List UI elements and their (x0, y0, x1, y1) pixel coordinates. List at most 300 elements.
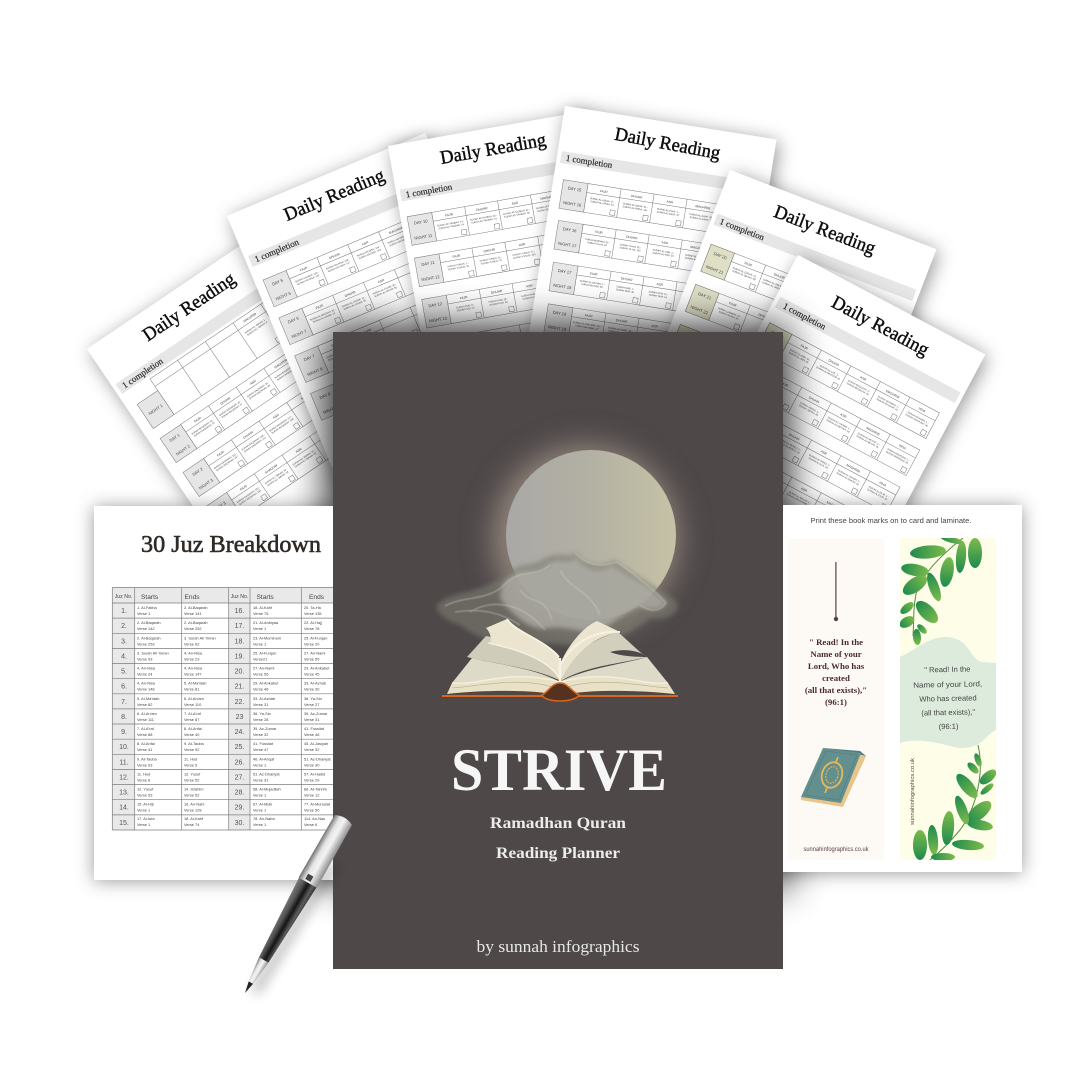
table: day 28: MAGHRIB (826, 500, 841, 511)
table: day 21: FAJR (728, 301, 738, 308)
table rows: Verse 31 (304, 717, 319, 722)
table: day 8: NIGHT 9 (322, 404, 340, 415)
table: day 16: DHUHR (626, 235, 639, 241)
table: day 16: FAJR (595, 230, 604, 235)
table: day 18: SURAH AN-NAML: 27 (575, 324, 599, 331)
table: day 25: FAJR (800, 344, 809, 351)
table: day 20: SURAH AL-QASAS: 88 (732, 270, 757, 282)
quote: Who has created (919, 693, 977, 704)
table: day 12: NIGHT 13 (428, 315, 448, 324)
table: day 12: ASR (526, 283, 534, 289)
icon: quran book (801, 748, 866, 807)
icon: leaves (898, 534, 999, 861)
table rows: 114. An-Nas (304, 816, 325, 821)
table: day 17: SURAH MU'MIN: 50 (581, 283, 603, 289)
heading: daily reading: Daily Reading (828, 292, 933, 361)
table rows: 33. Al-Azhab (304, 681, 326, 686)
table: day 11: SURAH YUNUS: 71 - (512, 250, 535, 257)
table header: Juz No. (231, 594, 248, 600)
table rows: 4. An-Nisa (184, 666, 203, 670)
table: day 15: DAY 15 (567, 185, 583, 193)
table: day 15: SURAH AL-ISRAA: 50 (590, 200, 615, 207)
table rows: Verse 6 (304, 822, 317, 827)
table rows: Verse 46 (304, 732, 319, 737)
table rows: 4. An-Nisa (137, 666, 156, 670)
table: day 21: NIGHT 22 (690, 304, 709, 316)
table: day 11: ASR (519, 242, 526, 247)
quote: (all that exists)," (805, 685, 867, 695)
table: day 16 (554, 220, 748, 279)
table: day 7 (295, 282, 483, 382)
table rows: 29. Al-Ankabut (304, 666, 330, 670)
table rows: 20. Ta-Ha (304, 605, 322, 610)
table rows: Verse 111 (137, 717, 154, 722)
table rows: 7. Al-A'raf (137, 726, 155, 731)
table rows: 26. (235, 759, 244, 766)
table rows: 22. Al-Hajj (304, 620, 322, 625)
panel: cover (333, 332, 783, 969)
table rows: 25. (235, 744, 244, 751)
table: day 1: SURAH BAQARAH: 49 - (274, 362, 298, 380)
table: night 1: SURAH ALI 'IMRAN: 9 (246, 321, 269, 337)
table: day 2: NIGHT 3 (198, 477, 215, 491)
table: day 22: DAY 22 (682, 331, 697, 341)
table: day 6: SURAH AL-AN'AM: 14 - (341, 296, 366, 309)
table rows: 17. Al-Isra (137, 816, 155, 821)
table: day 1: SURAH BAQARAH: 48 (249, 384, 271, 400)
quote: Lord, Who has (808, 661, 865, 671)
table: day 13: DHUHR (498, 330, 511, 336)
table rows: 8. Al-Anfal (184, 726, 202, 731)
label: 1 completion: 1 completion (405, 181, 453, 200)
table rows: Verse 55 (304, 656, 319, 661)
table: day 18: SURAH AN-NAML: 28 - (608, 326, 633, 333)
table rows: Verse 142 (137, 626, 155, 631)
table rows: 66. At-Tahrim (304, 787, 327, 792)
table rows: 5. Al-Ma'idah (184, 681, 206, 686)
table rows: 9. At-Tauba (137, 756, 158, 761)
table: day 7: DAY 7 (303, 353, 316, 362)
table: day 7: DHUHR (360, 327, 373, 336)
table: day 15 (559, 180, 753, 238)
table rows: Verse 1 (253, 626, 266, 631)
table rows: Verse 81 (184, 687, 199, 692)
table rows: 6. Al-An'am (184, 696, 204, 701)
url vertical: sunnahinfographics.co.uk (910, 758, 916, 825)
table rows: 3. (121, 638, 127, 645)
table rows: 14. (119, 805, 129, 812)
table: day 3: NIGHT 4 (221, 511, 237, 525)
table: day 18: DHUHR (616, 318, 628, 324)
table: day 7: SURAH AL-AN'AM: 128 (328, 349, 353, 362)
table: day 12: DHUHR (491, 289, 503, 295)
table: day 2: DHUHR (242, 430, 255, 440)
table rows: 4. An-Nisa (184, 650, 203, 655)
table: day 3: SURAH ALI 'IMRAN: 50 (294, 452, 317, 469)
table: day 6: ASR (377, 278, 385, 284)
table rows: Verse 87 (184, 717, 199, 722)
table rows: Verse 128 (184, 808, 202, 813)
table: day 10: NIGHT 11 (414, 233, 433, 241)
table: day 10: ASR (511, 201, 519, 206)
table: day 27: ASR (820, 449, 828, 456)
table: day 27: SURAH AL-GHASH: 26 (836, 472, 860, 487)
quote: " Read! In the (924, 665, 971, 674)
table: day 2: ASR (272, 412, 280, 420)
table rows: Verse 92 (184, 747, 199, 752)
table rows: 21. Al-Anbiyaa (253, 620, 279, 625)
bookmark: read quote with leaves (898, 534, 999, 861)
table header: Starts (256, 594, 274, 601)
table: day 16: ASR (661, 240, 669, 245)
table rows: 25. Al-Furqan (253, 650, 276, 655)
table: day 3: DAY 3 (214, 500, 227, 511)
table: day 26: SURAH AL-INFITAR: 19 (826, 419, 850, 434)
page: daily reading sheet 6 (652, 255, 985, 628)
subtitle line 2: Reading Planner (496, 845, 620, 862)
table: day 6: SURAH AL-AN'AM: 58 (374, 286, 398, 298)
table: day 2: SURAH BAQARAH: 157 (216, 455, 239, 472)
table rows: 29. Al-Ankabut (253, 681, 279, 686)
page: daily reading sheet 1 (87, 226, 443, 606)
table: day 25: SURAH AL-JINN: 28 (788, 351, 809, 365)
table rows: Verse 75 (253, 611, 268, 616)
table: day 17: NIGHT 18 (553, 282, 572, 290)
table rows: Verse 6 (137, 777, 150, 782)
table rows: Verse 5 (184, 762, 197, 767)
table rows: 2. Al-Baqarah (184, 605, 208, 610)
table rows: 21. (235, 684, 244, 691)
table: day 3: SURAH ALI 'IMRAN: 32 (267, 470, 290, 487)
table: day 26: FAJR (780, 381, 789, 388)
table: day 28: SURAH AL-BALAD: 1 - (788, 491, 811, 505)
table rows: Verse 30 (304, 762, 320, 767)
table: day 5: MAGHRIB (388, 226, 404, 235)
table rows: 23 (236, 714, 243, 721)
heading: daily reading: Daily Reading (613, 124, 722, 164)
table rows: Verse 47 (253, 747, 268, 752)
table rows: 1. Al-Fatiha (137, 605, 158, 610)
table: day 18: FAJR (585, 313, 594, 318)
table: day 25: SURAH AN-NABA: 1 - (907, 411, 929, 425)
quote: (all that exists)," (921, 707, 976, 718)
table: day 5: DHUHR (328, 252, 341, 260)
table: day 11 (414, 225, 608, 287)
table: day 27: DHUHR (788, 433, 801, 442)
table: day 2: SURAH BAQARAH: 177 - (269, 415, 293, 433)
table: day 26: SURAH INSHIQAQ: 25 (885, 450, 909, 465)
table: day 15: SURAH AL-KAHF: 38 - (689, 213, 714, 220)
table rows: Verse 1 (253, 641, 266, 646)
table rows: 58. Al-Mujadilah (253, 787, 281, 792)
table: day 28: ISHA (859, 518, 868, 525)
table rows: 15. (119, 820, 129, 827)
table: day 11: FAJR (452, 254, 461, 259)
watercolor wash (900, 637, 996, 748)
label: 1 completion: 1 completion (718, 216, 766, 243)
table: day 17: SURAH AL-MU'MIN: 1 - (580, 279, 605, 286)
table: day 26: SURAH AT-TAKWIR: 1 - (827, 416, 851, 431)
table: day 25: SURAH QIYAMAH: 1 - (877, 395, 900, 409)
table: day 11: SURAH YUNUS: 1 - (447, 262, 469, 269)
table: day 1: FAJR (193, 415, 203, 424)
url: sunnahinfographics.co.uk (804, 846, 869, 853)
table: day 12: SURAH HUD: 61 - (521, 292, 541, 298)
table: day 3 (206, 399, 381, 530)
table: day 27: SURAH AL-FAJR: 30 (866, 488, 888, 502)
table: day 12: DAY 12 (428, 301, 443, 308)
table: night 1: SURAH ALI 'IMRAN: 1 - (244, 318, 267, 335)
table: day 18: SURAH AN-NAML: 55 (608, 330, 632, 336)
table rows: 12. Yusuf (137, 787, 154, 792)
table rows (119, 605, 332, 827)
table rows: Verse 52 (184, 777, 199, 782)
table rows: 51. Az-Dhariyat (304, 756, 332, 761)
table: day 1: SURAH BAQARAH: 24 (193, 421, 216, 438)
table: day 6: SURAH AL-MA'IDAH: 82 - (309, 308, 336, 322)
table: day 2 (183, 365, 358, 497)
table rows: Verse 148 (137, 687, 155, 692)
table: day 1: SURAH BAQARAH: 10 - (191, 418, 215, 436)
table: day 16: MAGHRIB (690, 245, 705, 251)
table rows: 11. Hud (184, 756, 197, 761)
table: day 26: DHUHR (808, 395, 821, 405)
table: day 5: SURAH AN-NISA: 163 - (387, 232, 412, 245)
table rows: Verse 78 (304, 626, 319, 631)
table rows: 8. (121, 714, 127, 721)
table: day 12: SURAH HUD: 28 - (488, 298, 508, 304)
table: day 10: SURAH AT-TAUBAH: 24 (438, 223, 465, 230)
table: day 17: DHUHR (621, 276, 633, 282)
page: daily reading sheet 5 (619, 170, 936, 539)
table: day 18: DAY 18 (552, 310, 567, 317)
table rows: 2. (121, 623, 127, 630)
table: day 27: SURAH AL-GHASH: 1 - (837, 469, 861, 484)
table rows: 39. Az-Zumar (304, 711, 328, 716)
table rows: Verse 50 (304, 808, 320, 813)
table: day 10: MAGHRIB (540, 194, 555, 201)
table rows: 15. Al-Hijr (137, 802, 155, 807)
table: day 10: SURAH AT-TAUBAH: 55 (504, 211, 531, 219)
table: day 10: DAY 10 (413, 218, 429, 226)
table: day 13 (429, 308, 623, 369)
table rows: 30. (235, 820, 244, 827)
table: day 17: SURAH NUR: 31 - (648, 290, 668, 296)
table rows: Verse 88 (137, 732, 152, 737)
table: day 28: SURAH AD-DUHA: 11 (817, 509, 840, 523)
table: day 3: SURAH ALI 'IMRAN: 10 - (264, 468, 288, 485)
table: day 6: SURAH AL-AN'AM: 13 (312, 312, 336, 324)
table: day 2: FAJR (216, 449, 226, 458)
table: day 2: SAF (300, 394, 307, 401)
table: day 17: FAJR (590, 271, 599, 277)
table rows: 57. Al-Hadid (304, 771, 325, 776)
bookmark: read quote with quran (788, 539, 884, 860)
table: day 27: SURAH AL-BURUJ: 22 (777, 441, 801, 455)
table rows: 27. An-Naml (253, 666, 275, 670)
table header: Starts (141, 594, 159, 601)
table: day 18: NIGHT 19 (548, 324, 567, 332)
table: day 10: SURAH AT-TAUBAH: 70 (537, 206, 564, 213)
table rows: 19. (235, 653, 244, 660)
table: day 25: SURAH AL-MUZZAM: 20 (815, 366, 841, 381)
table: day 2: SURAH BAQARAH: 176 (243, 436, 267, 453)
table: day 27: ISHA (878, 481, 888, 488)
table: day 11: NIGHT 12 (421, 274, 441, 282)
table: day 2: SURAH BAQARAH: 188 (271, 417, 295, 435)
table rows: Verse 52 (184, 793, 199, 798)
table rows: 5. Al-Ma'idah (137, 696, 159, 701)
table rows: 36. Ya-Sin (253, 711, 271, 716)
table: day 25: SURAH MUDDATH: 56 (846, 382, 870, 397)
table header: Juz No. (115, 594, 132, 600)
table: day 25: MAGHRIB (885, 389, 900, 399)
table header (115, 594, 325, 601)
table rows: 2. Al-Baqarah (137, 620, 161, 625)
illustration: open book (442, 619, 678, 701)
table: day 10: SURAH AT-TAUBAH: 56 - (536, 203, 563, 210)
table: day 21 (685, 284, 875, 380)
table rows: 13. (119, 790, 129, 797)
table: day 27: SURAH AL-FAJR: 1 - (868, 485, 889, 499)
table rows: 10. (119, 744, 129, 751)
table: day 11: SURAH YUNUS: 109 (513, 253, 536, 260)
table: day 28: NIGHT 29 (702, 453, 721, 467)
table: day 20: SURAH AL-ANKABUT: 1 - (763, 278, 790, 291)
table: day 6: SURAH AL-AN'AM: 35 (343, 299, 367, 311)
heading: daily reading: Daily Reading (439, 130, 548, 169)
table rows: Verse 1 (137, 611, 150, 616)
table rows: Verse 253 (137, 641, 155, 646)
table: night 1: NIGHT 1 (147, 403, 164, 416)
panel: bookmarks sheet (775, 505, 1022, 872)
table: day 26: NIGHT 27 (741, 379, 761, 392)
table: day 16: NIGHT 17 (558, 241, 578, 249)
table: day 3: SHADOW (264, 463, 278, 475)
table: juz breakdown (112, 588, 339, 830)
table rows: 4. An-Nisa (137, 681, 156, 686)
table: day 11: DHUHR (483, 247, 496, 253)
table rows: 1. (121, 608, 127, 615)
table rows: Verse 93 (137, 656, 152, 661)
table: day 3: ASR (295, 446, 303, 454)
table: day 7: NIGHT 8 (306, 366, 324, 377)
table: day 15: SURAH AL-KAHF: 74 (689, 216, 713, 223)
table: day 26: SURAH AL-MUTAF: 1 - (857, 432, 881, 446)
table: day 2: DAY 2 (191, 466, 204, 477)
table: day 10: FAJR (445, 212, 454, 218)
table: day 10: SURAH AT-TAUBAH: 14 - (437, 220, 465, 228)
table: day 10: DHUHR (476, 206, 489, 212)
table: day 26: ISHA (898, 443, 907, 451)
table rows: 27. An-Naml (304, 650, 326, 655)
table: day 16: SURAH AL-ANB: 1 - (652, 249, 675, 255)
table: day 5: ASR (361, 240, 370, 246)
table: day 26: SURAH INSHIQAQ: 1 - (886, 448, 910, 462)
label: 1 completion: 1 completion (253, 237, 301, 264)
table rows: 9. (121, 729, 127, 736)
table: day 6 (279, 244, 467, 345)
table rows: 17. (235, 623, 244, 630)
page: daily reading sheet 2 (227, 133, 545, 502)
table: day 15: SURAH AL-ISRAA: 104 (622, 205, 648, 212)
table: day 27 (717, 397, 900, 513)
quote: Name of your (810, 649, 862, 659)
table rows: Verse 1 (253, 808, 266, 813)
table: day 25: SURAH AL-JINN: 10 - (789, 348, 811, 362)
table: day 22: NIGHT 23 (674, 344, 694, 356)
table rows: 4. (121, 653, 127, 660)
table rows: 45. Al-Jasiyah (304, 741, 328, 746)
table: day 25: SURAH AD-DAHR: 31 (876, 398, 899, 412)
table: day 26: MAGHRIB (865, 426, 880, 437)
table rows: 16. An-Nahl (184, 802, 204, 807)
label: 1 completion: 1 completion (565, 153, 614, 170)
table rows: 33. Al-Azhab (253, 696, 275, 701)
table: day 13: NIGHT 14 (436, 357, 455, 365)
table: day 20: SURAH AL-ANKABUT: 30 (762, 281, 789, 294)
table rows: Verse 92 (184, 641, 199, 646)
table rows: 3. Surah Ali 'Imran (184, 635, 216, 640)
table: day 15: SURAH AL-ISRAA: 17 - (590, 197, 615, 204)
table rows: 8. Al-Anfal (137, 741, 155, 746)
table: day 15: NIGHT 16 (563, 200, 582, 208)
table: day 2: SURAH BAQARAH: 158 - (241, 433, 266, 451)
table: day 3: SURAH BAQARAH: 253 - (236, 486, 261, 504)
table: day 3: SURAH BAQARAH: 265 (239, 489, 262, 506)
table: day 5 (263, 206, 451, 307)
table: day 1: SURAH BAQARAH: 25 - (219, 400, 242, 417)
table: day 26: SURAH 'ABASA: 1 - (799, 401, 820, 414)
table rows: 3. Surah Ali 'Imran (137, 650, 169, 655)
table rows: 6. Al-An'am (137, 711, 157, 716)
table rows: Verse 27 (304, 702, 319, 707)
quote: " Read! In the (809, 637, 863, 647)
table rows: Verse 1 (253, 762, 266, 767)
table rows: 39. Az-Zumar (253, 726, 277, 731)
table rows: Verse 32 (253, 732, 268, 737)
table rows: 28. (235, 790, 244, 797)
table: day 5: DAY 5 (271, 277, 284, 287)
table: day 6: NIGHT 7 (291, 328, 308, 339)
table rows: Verse 24 (137, 672, 153, 676)
table rows: Verse 46 (253, 687, 268, 692)
quote: (96:1) (825, 697, 847, 707)
table: day 8: DAY 8 (319, 391, 332, 400)
table: day 26: SURAH 'ABASA: 42 (798, 404, 819, 417)
table: day 5: SURAH AN-NISA: 147 (327, 261, 351, 273)
table: day 16: DAY 16 (563, 226, 578, 233)
table: day 16: SURAH TA-HA: 135 (619, 246, 641, 253)
label: 1 completion: 1 completion (781, 301, 828, 332)
page: daily reading sheet 4 (517, 106, 776, 446)
table rows: 18. Al-Kahf (184, 816, 204, 821)
table rows: 24. (235, 729, 244, 736)
quote: (96:1) (939, 722, 959, 731)
table: day 25 (756, 323, 939, 438)
table rows: Verse 147 (184, 672, 202, 676)
table: day 5: SURAH AN-NISA: 176 (389, 235, 413, 247)
table rows: Verse 93 (137, 762, 152, 767)
page: daily reading sheet 3 (388, 111, 638, 451)
table: day 6: DHUHR (344, 290, 357, 298)
table: day 21: DAY 21 (697, 291, 713, 301)
table rows: 14. Ibrahim (184, 787, 203, 792)
table: day 15: FAJR (600, 189, 609, 194)
table rows: 51. Az-Dhariyat (253, 771, 281, 776)
table: day 17: SURAH NUR: 30 (616, 288, 635, 294)
table: day 12: FAJR (459, 295, 469, 300)
